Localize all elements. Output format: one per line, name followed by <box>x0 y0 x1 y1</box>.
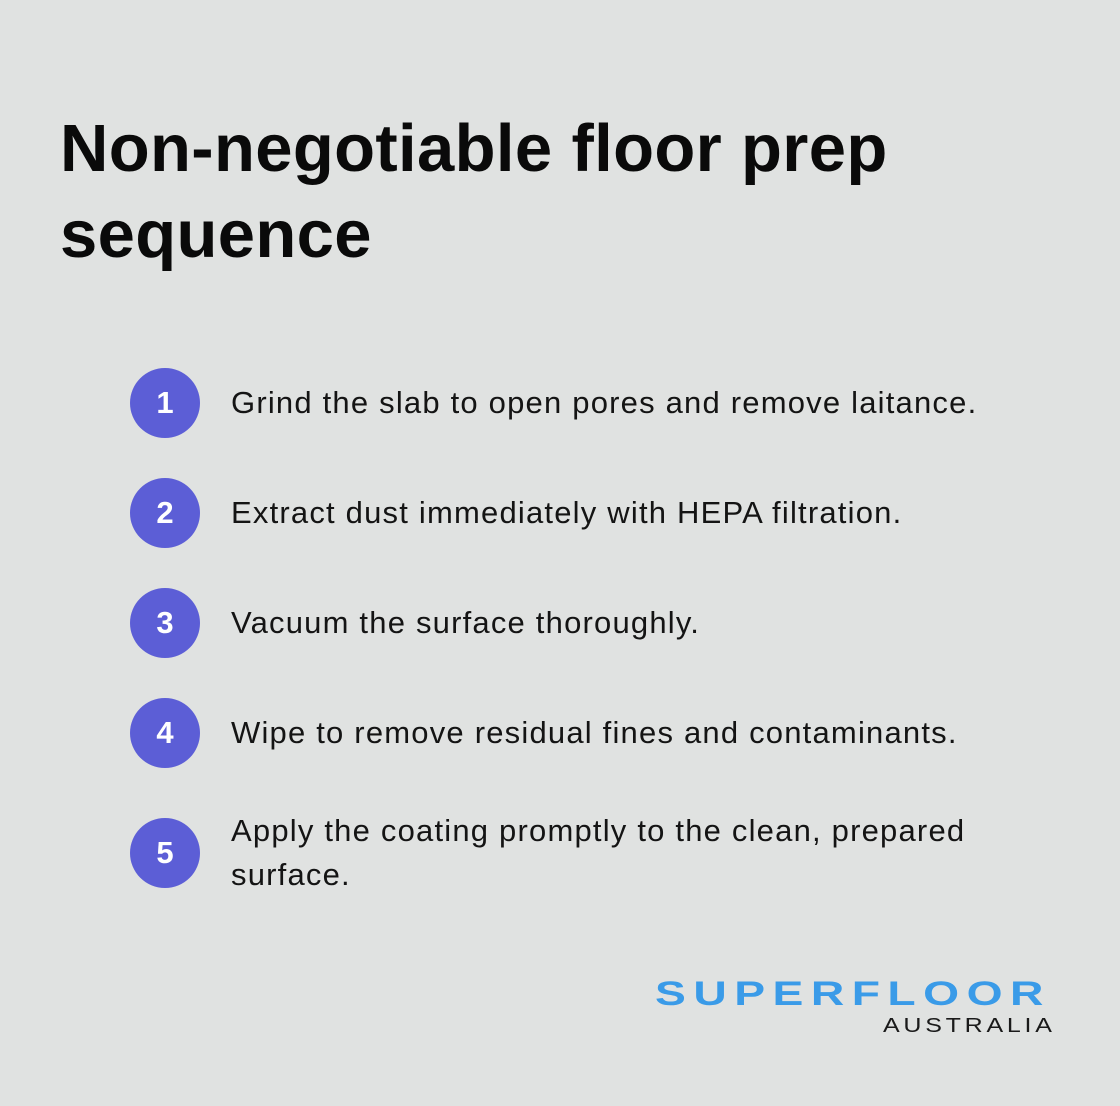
text: 5 <box>156 835 174 870</box>
step 4 <box>130 698 958 768</box>
text: 3 <box>156 605 174 640</box>
text: 2 <box>156 495 174 530</box>
step 1 <box>130 368 977 438</box>
text: 1 <box>156 385 174 420</box>
logo <box>655 975 1056 1037</box>
title: sequence <box>60 197 372 272</box>
step 5 <box>130 813 965 892</box>
text: surface. <box>231 857 351 892</box>
logo: AUSTRALIA <box>883 1015 1056 1037</box>
title <box>60 111 888 272</box>
text: Wipe to remove residual fines and contaminants. <box>231 715 958 750</box>
step 3 <box>130 588 700 658</box>
logo: SUPERFLOOR <box>655 975 1051 1013</box>
title: Non-negotiable floor prep <box>60 111 888 186</box>
text: Extract dust immediately with HEPA filtration. <box>231 495 902 530</box>
text: Apply the coating promptly to the clean, prepared <box>231 813 965 848</box>
step 2 <box>130 478 902 548</box>
text: 4 <box>156 715 174 750</box>
text: Grind the slab to open pores and remove laitance. <box>231 385 977 420</box>
text: Vacuum the surface thoroughly. <box>231 605 700 640</box>
